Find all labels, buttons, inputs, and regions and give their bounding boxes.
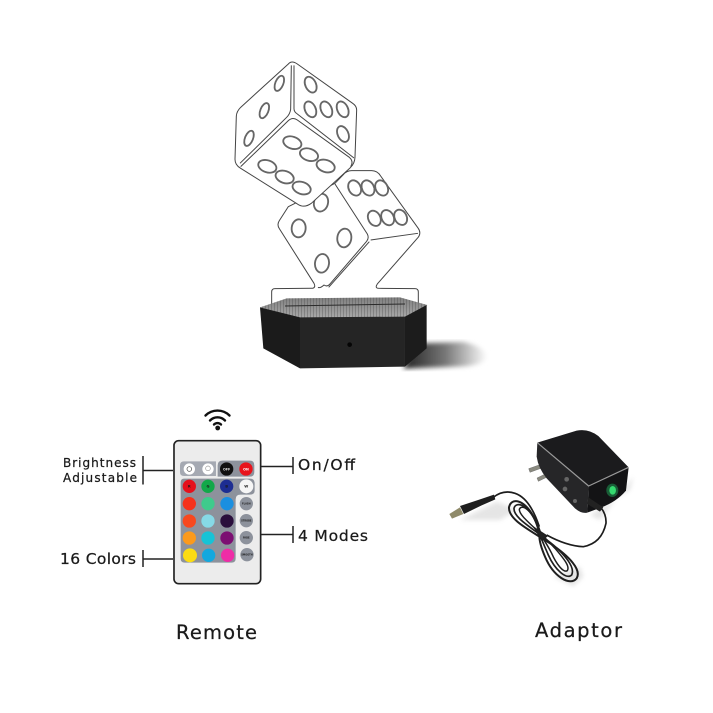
- adaptor prongs: [529, 462, 558, 481]
- callout lines: [143, 456, 293, 567]
- colour buttons: [183, 497, 234, 562]
- brightness buttons: [184, 463, 214, 475]
- on off button panel: [218, 461, 254, 477]
- adaptor green led: [606, 484, 618, 497]
- RGBW buttons: W: [244, 485, 248, 489]
- base power jack: [347, 342, 352, 347]
- mode buttons: STROBE: [241, 520, 252, 523]
- base shadow: [403, 342, 487, 369]
- adaptor cable coil: [509, 501, 578, 581]
- adaptor cable tail: [493, 492, 606, 547]
- label: brightness adjustable: Brightness: [63, 456, 136, 470]
- base front panels: [260, 305, 427, 368]
- power adaptor: [449, 430, 633, 587]
- RGBW buttons: B: [225, 485, 228, 489]
- lower die pips, side face: [346, 178, 410, 228]
- mode buttons: SMOOTH: [241, 554, 253, 557]
- lamp: 3D dice acrylic panel: [235, 62, 420, 304]
- upper die pips, front face: [257, 134, 336, 197]
- upper die: [235, 62, 357, 206]
- remote control: [174, 441, 261, 584]
- adaptor strain relief: [587, 497, 603, 512]
- RGBW buttons: R: [188, 485, 191, 489]
- adaptor drop shadow: [460, 477, 633, 587]
- mode buttons: [240, 497, 254, 561]
- label: brightness adjustable: Adjustable: [63, 471, 137, 485]
- lamp base: [260, 297, 487, 369]
- label: 16 colors: 16 Colors: [60, 550, 136, 568]
- lower die and acrylic stand: [272, 171, 420, 304]
- RGBW buttons: [183, 479, 253, 493]
- adaptor DC plug: [449, 495, 495, 519]
- base top surface: [260, 297, 427, 318]
- mode buttons: FADE: [243, 537, 250, 540]
- wifi icon: [206, 411, 230, 430]
- base slot: [285, 304, 405, 306]
- off button: OFF: [223, 467, 230, 471]
- remote body: [174, 441, 261, 584]
- RGBW buttons: G: [206, 485, 209, 489]
- off button: [220, 462, 233, 476]
- on button: [239, 462, 253, 476]
- label: brightness adjustable: [63, 456, 137, 485]
- adaptor regulatory marks: [563, 477, 577, 503]
- lower die pips, front face: [291, 192, 353, 274]
- adaptor body: [537, 430, 629, 513]
- label: adaptor: Adaptor: [535, 619, 623, 642]
- upper die pips, right face: [302, 75, 351, 144]
- upper die pips, left face: [242, 74, 286, 147]
- on button: ON: [243, 467, 249, 471]
- label: 4 modes: 4 Modes: [298, 527, 368, 545]
- brightness button panel: [180, 461, 216, 476]
- mode buttons: FLASH: [242, 503, 251, 506]
- label: on/off: On/Off: [298, 456, 355, 474]
- colour button panel: [181, 479, 255, 563]
- label: remote: Remote: [176, 621, 257, 644]
